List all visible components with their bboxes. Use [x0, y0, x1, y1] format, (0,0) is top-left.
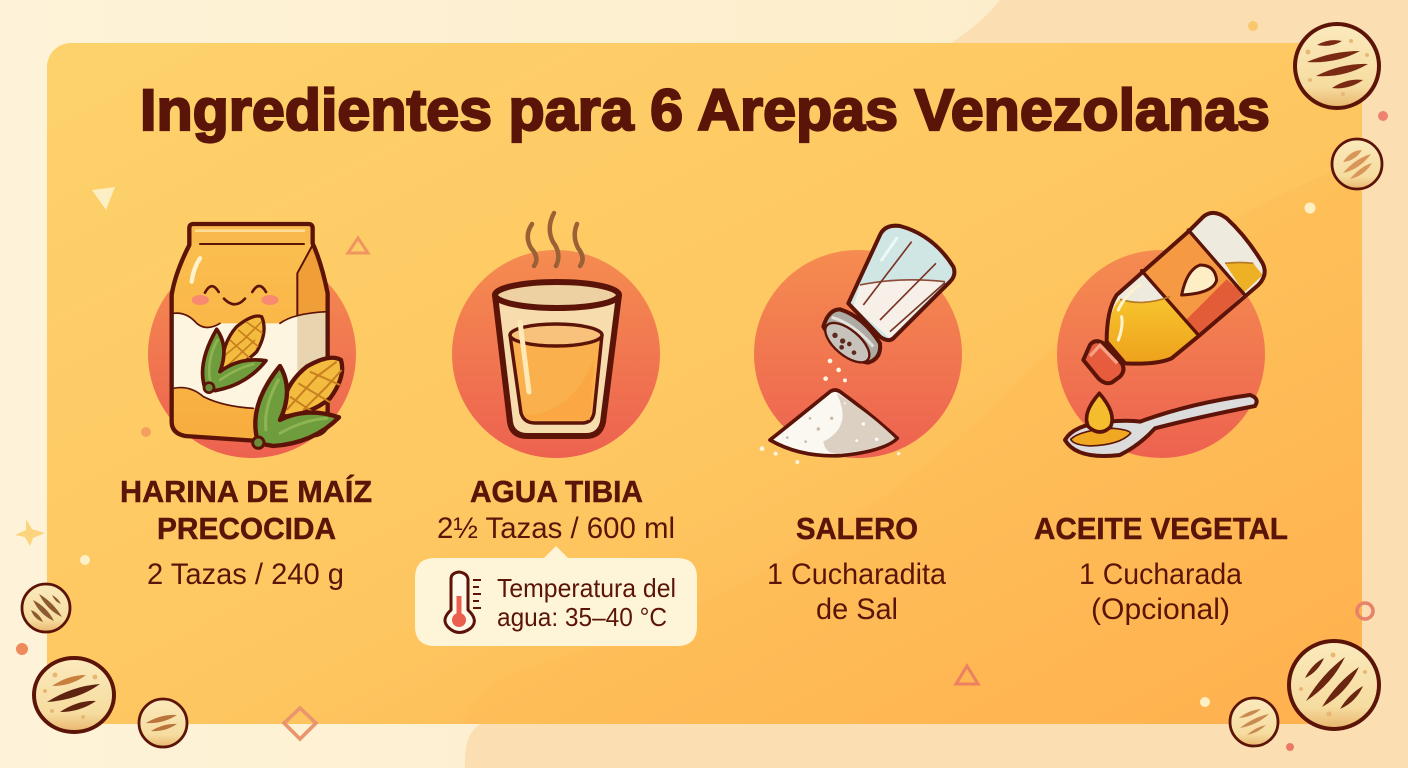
steam: [528, 213, 583, 266]
bottle cap: [1083, 341, 1123, 383]
salt pile: [770, 390, 897, 456]
icon: salt shaker: [760, 226, 954, 464]
ingredient 1 text: 2 Tazas / 240 g: [147, 558, 344, 591]
arepa top right large: [1295, 24, 1379, 108]
icon: oil bottle and spoon: [1065, 213, 1265, 456]
ingredient 3 text: [767, 511, 946, 626]
arepa left small: [22, 584, 70, 632]
ingredient 2 text: [437, 474, 675, 545]
ingredient 3 text: 1 Cucharadita: [767, 558, 946, 591]
arepa bottom right small: [1230, 698, 1278, 746]
ingredient 4 text: ACEITE VEGETAL: [1034, 511, 1288, 546]
ingredient 3 text: de Sal: [816, 593, 898, 626]
ingredient 2 text: 2½ Tazas / 600 ml: [437, 512, 675, 545]
ingredient 4 text: 1 Cucharada: [1079, 558, 1242, 591]
arepa right medium: [1332, 139, 1382, 189]
circle backdrops: [148, 250, 1265, 458]
spoon: [1065, 393, 1257, 456]
arepa bottom left large: [34, 658, 114, 732]
ingredient 1 text: HARINA DE MAÍZ: [120, 474, 372, 509]
ingredient 4 text: (Opcional): [1091, 593, 1230, 626]
icon: thermometer: [445, 572, 481, 632]
ingredient 2 text: AGUA TIBIA: [470, 474, 643, 509]
ingredient 3 text: SALERO: [796, 511, 918, 546]
callout: water temperature: agua: 35–40 °C: [497, 602, 667, 632]
callout: water temperature: Temperatura del: [497, 573, 676, 603]
arepa bottom small: [139, 699, 187, 747]
icon: small corn: [203, 316, 266, 393]
callout: water temperature: [415, 546, 697, 646]
shaker cap: [819, 309, 880, 369]
icon: corn flour bag: [172, 224, 342, 448]
icon: steaming glass of water: [495, 213, 619, 436]
icon: large corn: [253, 358, 342, 448]
ingredient 4 text: [1034, 511, 1288, 626]
arepa bottom right large: [1289, 641, 1379, 729]
ingredient 1 text: [120, 474, 372, 591]
title: Ingredientes para 6 Arepas Venezolanas: [140, 78, 1270, 143]
ingredient 1 text: PRECOCIDA: [157, 511, 336, 546]
